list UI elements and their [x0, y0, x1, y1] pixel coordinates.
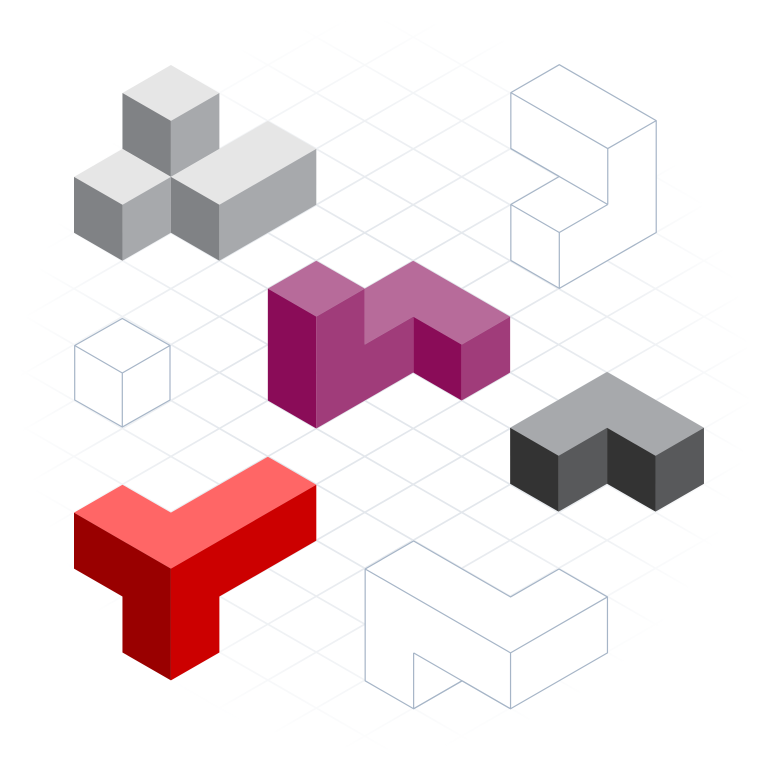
grey top cube: [122, 65, 219, 177]
magenta top faces: [268, 261, 510, 345]
red right face: [171, 485, 316, 680]
magenta right faces: [316, 289, 510, 428]
dark grey solid block: [510, 372, 704, 512]
grey long bar: [171, 121, 316, 261]
magenta solid block: [268, 261, 510, 428]
light grey solid block: [74, 65, 316, 261]
red left face: [74, 513, 171, 680]
isometric background grid: [70, 70, 700, 696]
grey left cube: [74, 149, 171, 261]
magenta left faces: [268, 289, 462, 428]
dark block left faces: [510, 428, 656, 512]
outlined single cube: [75, 318, 170, 427]
red top face: [74, 457, 316, 569]
dark block top face: [510, 372, 704, 456]
red solid block: [74, 457, 316, 680]
outlined block bottom: [365, 541, 607, 709]
outlined block top right: [511, 65, 656, 288]
dark block right faces: [559, 428, 704, 512]
